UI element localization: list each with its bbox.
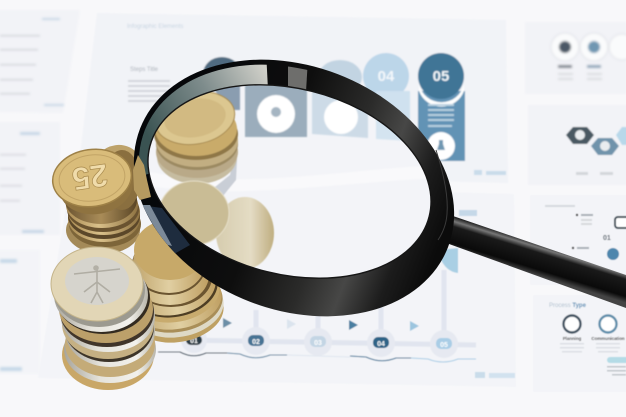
coin face: Vitruvian man bbox=[51, 247, 143, 321]
timeline arrows bbox=[223, 318, 419, 331]
body text lines bbox=[128, 80, 170, 102]
magnifying glass bbox=[133, 60, 626, 316]
circle icons row bbox=[551, 33, 626, 61]
panel: right sheet with hexagons bbox=[528, 105, 626, 185]
magnified infographic bbox=[214, 86, 402, 141]
sheet title: Process Type bbox=[549, 303, 587, 309]
node 03 bbox=[304, 328, 332, 356]
rim reflection: navy tint bbox=[143, 206, 190, 254]
node 04 bbox=[367, 329, 395, 357]
node 04: 04 bbox=[377, 341, 385, 348]
panel: right sheet with circle icons bbox=[525, 22, 626, 94]
step 05 column bbox=[418, 53, 465, 161]
panel: top left sheet bbox=[0, 10, 80, 113]
step 05 column: 05 bbox=[433, 68, 449, 85]
panel: lower left sheet bbox=[0, 250, 40, 374]
sheet subheading: Steps Title bbox=[130, 67, 159, 73]
step 04 column: 04 bbox=[378, 68, 395, 85]
panel: right sheet process type bbox=[533, 295, 626, 392]
step 04 column bbox=[363, 53, 410, 141]
handle bbox=[438, 215, 626, 308]
list items bbox=[572, 214, 593, 249]
timeline track bbox=[180, 270, 476, 345]
rim reflection: silver streak bbox=[142, 205, 172, 246]
hexagons bbox=[566, 127, 626, 155]
rim bbox=[96, 15, 492, 361]
panel: center top infographic sheet bbox=[78, 13, 508, 183]
step 03 box and icon bbox=[312, 60, 368, 138]
node 05 bbox=[430, 330, 458, 358]
lens edge line bbox=[127, 56, 452, 307]
coin stack: back left bbox=[49, 142, 144, 254]
sheet heading: Infographic Elements bbox=[127, 24, 183, 30]
node 02 bbox=[242, 327, 270, 355]
rim highlight: top right grey patch bbox=[288, 66, 308, 90]
panel: right sheet with list bbox=[530, 195, 626, 285]
node 01: 01 bbox=[190, 338, 198, 345]
node 02: 02 bbox=[252, 339, 260, 346]
rim outer lip line bbox=[436, 150, 447, 240]
ring: planning: Planning bbox=[563, 336, 582, 341]
number 01: 01 bbox=[603, 235, 611, 242]
node 03: 03 bbox=[314, 340, 322, 347]
coin stack: front with silver coin bbox=[51, 247, 156, 390]
magnified coin stack bbox=[154, 92, 239, 195]
step 01 tab bbox=[203, 57, 241, 91]
coin edge seen beside the rim bbox=[133, 155, 151, 200]
footer page label bbox=[475, 372, 515, 378]
hex icon bbox=[615, 217, 626, 228]
ring: communication: Communication bbox=[591, 336, 625, 341]
footer page label bbox=[474, 170, 506, 175]
panel: center bottom timeline sheet bbox=[38, 182, 516, 387]
pill button bbox=[607, 357, 626, 363]
timeline underline bbox=[158, 352, 476, 362]
node 01 bbox=[181, 327, 207, 353]
magnified lower coins bbox=[159, 181, 274, 269]
pie chart fragment bbox=[438, 248, 458, 273]
step 02 box and icon bbox=[245, 84, 306, 135]
panel: middle left sheet bbox=[0, 122, 60, 235]
blue icon bbox=[607, 248, 619, 260]
coin stack: middle bbox=[126, 220, 228, 350]
coin face: 25: 25 bbox=[70, 157, 110, 197]
lens bbox=[148, 86, 430, 278]
node 05: 05 bbox=[440, 342, 448, 349]
rim highlight: top silver band bbox=[139, 64, 268, 174]
